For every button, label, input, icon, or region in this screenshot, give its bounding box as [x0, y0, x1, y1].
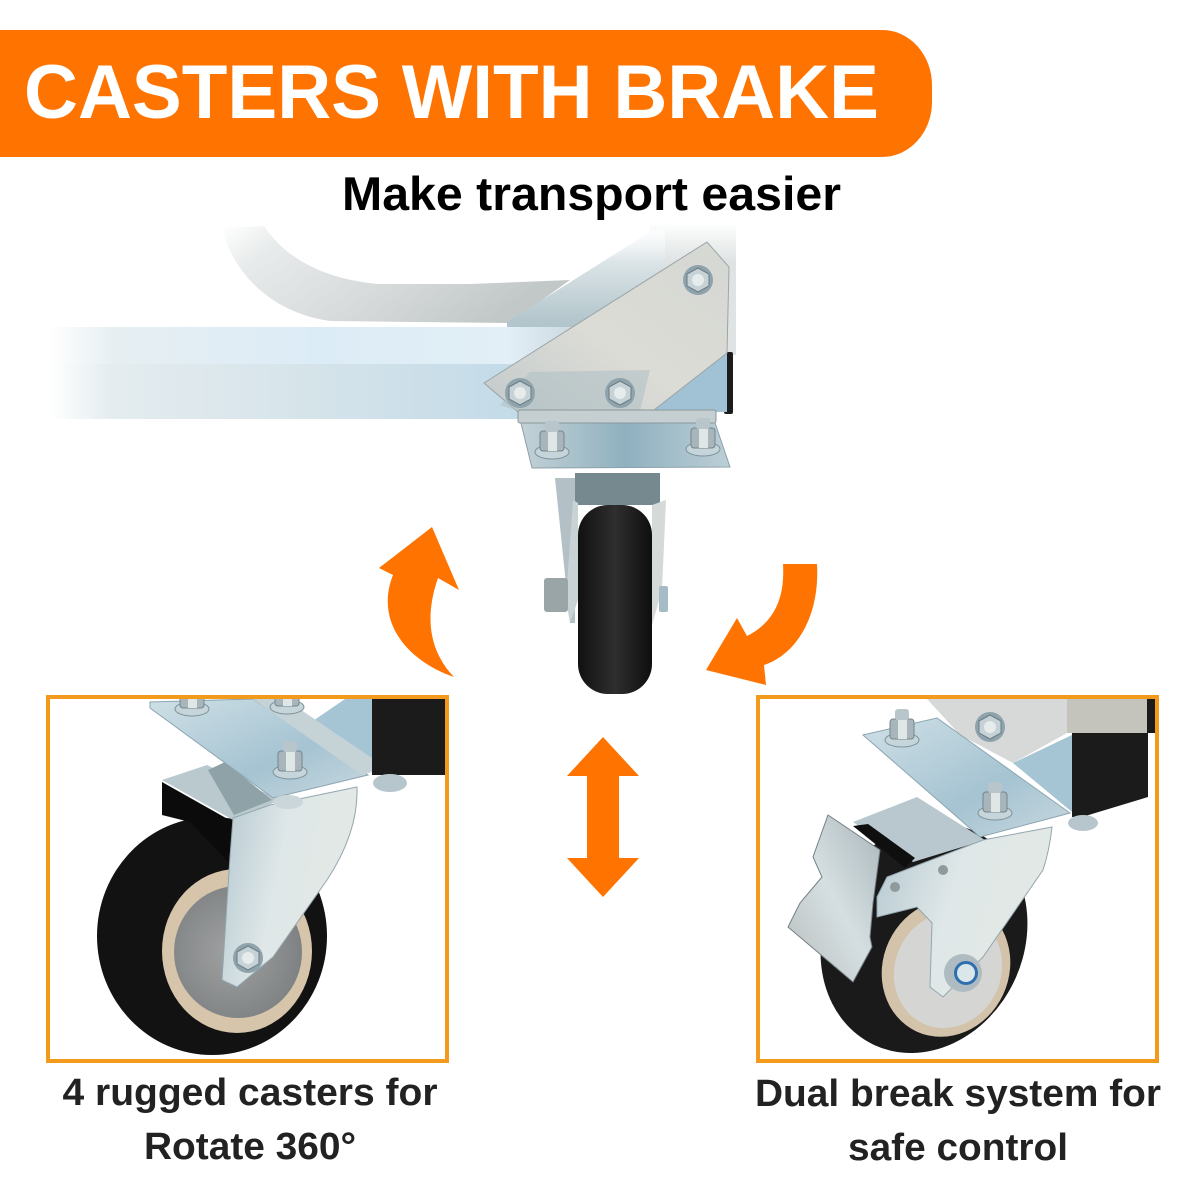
fork blade [877, 827, 1052, 997]
left photo contents [97, 676, 445, 1055]
axle nuts [544, 578, 568, 612]
panel: left caster photo [48, 676, 447, 1061]
horizontal rail [50, 327, 590, 419]
black leg [372, 699, 445, 775]
arrow: rotate left [379, 527, 459, 677]
gusset plate [484, 242, 729, 412]
caption: right: Dual break system for [755, 1073, 1161, 1115]
wheel hub [894, 918, 1002, 1028]
swivel [208, 762, 272, 815]
subtitle: Make transport easier [342, 167, 841, 220]
caption: left: Rotate 360° [144, 1126, 356, 1168]
fork blade [222, 787, 357, 987]
silver upright [1067, 699, 1147, 733]
caption: right [755, 1073, 1161, 1169]
caption: left: 4 rugged casters for [62, 1072, 438, 1114]
brake lever [788, 815, 880, 982]
caster fork back [555, 478, 575, 623]
mount plate [863, 718, 1070, 837]
title banner: CASTERS WITH BRAKE [24, 50, 879, 135]
wheel tire [97, 817, 327, 1055]
wheel hub [174, 886, 302, 1018]
fasteners [175, 676, 407, 973]
arrow: rotate right [706, 564, 817, 685]
thin leg strip [1147, 699, 1155, 733]
brake slot [853, 824, 915, 868]
weld strip [518, 410, 716, 423]
fasteners [885, 709, 1098, 992]
fork inside [162, 782, 226, 820]
arrow: up and down [567, 737, 639, 897]
panel frame [758, 697, 1157, 1061]
black side cap [724, 352, 733, 414]
fork cover [566, 500, 578, 623]
fork top [853, 797, 985, 862]
wheel tire [820, 827, 1028, 1053]
caption: left [62, 1072, 438, 1168]
wheel rim [162, 869, 312, 1033]
panel frame [48, 697, 447, 1061]
curved tube [222, 226, 570, 323]
gusset [927, 699, 1067, 763]
bracket interior [1013, 735, 1072, 812]
main photo: cart frame with caster [50, 222, 740, 694]
right photo contents [784, 699, 1155, 1087]
darker base of gusset [500, 370, 650, 411]
caster wheel [578, 505, 652, 694]
bolts [505, 265, 720, 459]
wheel rim [882, 908, 1010, 1037]
lower plate [521, 420, 730, 468]
fork top [162, 765, 280, 820]
back plate [507, 230, 665, 412]
title banner [0, 30, 932, 157]
black leg [1072, 733, 1148, 817]
mount plate [150, 699, 368, 798]
bracket interior [315, 699, 372, 758]
panel: right caster photo [758, 697, 1157, 1087]
blue corner of bracket [650, 350, 727, 412]
top fade [600, 222, 740, 262]
upright frame [650, 225, 736, 355]
caption: right: safe control [848, 1127, 1068, 1169]
weld strip [253, 699, 372, 775]
swivel spring [575, 473, 660, 505]
